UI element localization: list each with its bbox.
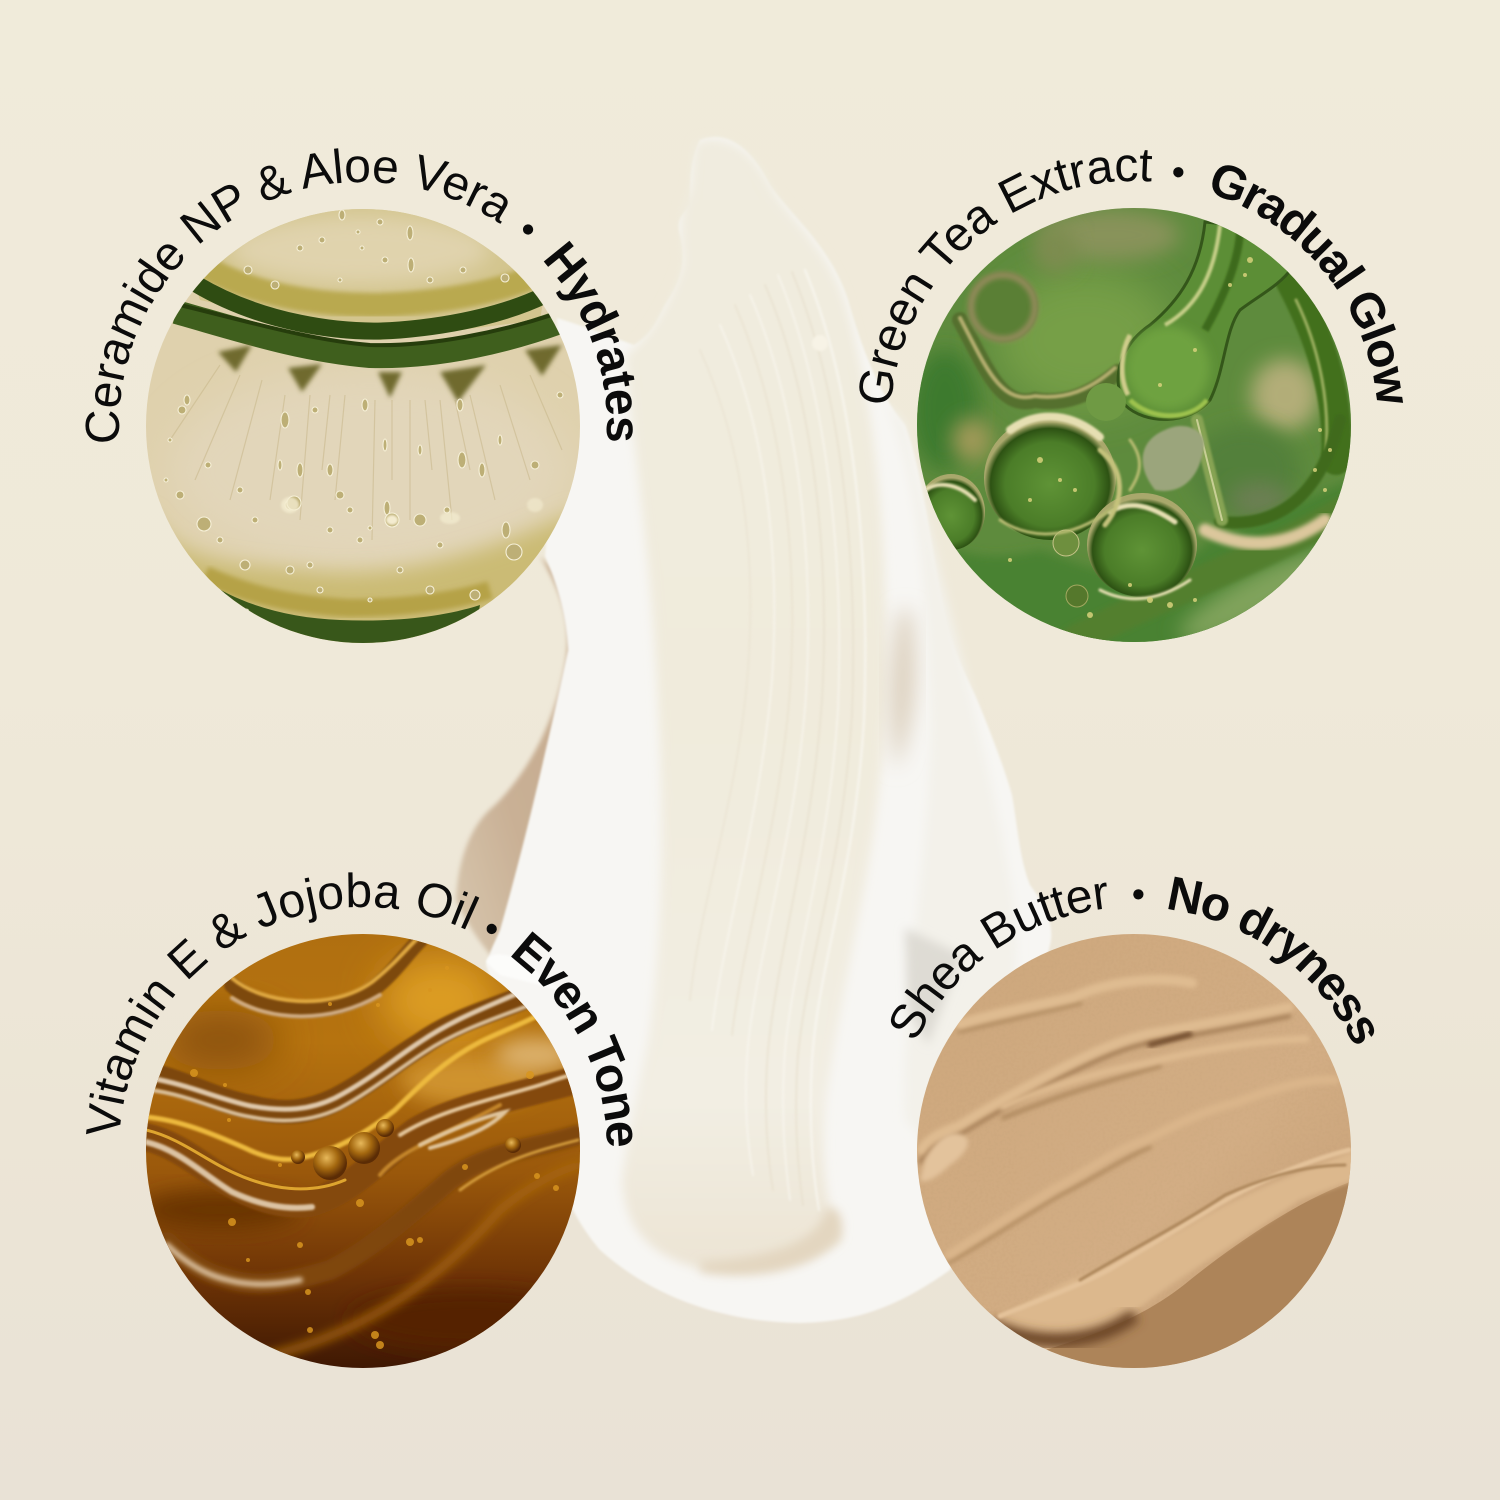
smear cast shadow <box>456 556 585 965</box>
tiny gold bubbles <box>1008 257 1332 618</box>
oil bubbles <box>313 1146 347 1180</box>
foam bubbles <box>984 416 1116 540</box>
photo: green tea bubbles <box>911 208 1351 660</box>
smear body <box>486 137 1051 1323</box>
bubble walls <box>960 280 1345 640</box>
photo: shea butter swirl <box>917 934 1355 1368</box>
smear brushed ridges <box>690 270 865 1210</box>
photo: golden oil waves <box>140 934 590 1368</box>
smear highlight bead <box>812 335 828 351</box>
infographic canvas <box>85 136 1404 1368</box>
lower left liquid <box>954 478 1344 642</box>
holes in foam <box>1086 383 1126 421</box>
aloe droplets <box>164 210 563 615</box>
label: Vitamin E and Jojoba Oil, Even Tone: Vitamin E & Jojoba Oil•Even Tone <box>86 872 632 1146</box>
panel: shea butter <box>890 876 1374 1368</box>
highlights <box>925 417 1190 599</box>
butter ridge lump <box>920 1133 968 1181</box>
cream smear <box>456 137 1051 1323</box>
aloe fibre pits <box>218 345 562 402</box>
panel: green tea extract <box>859 150 1404 642</box>
smear lip near oil circle <box>486 954 560 990</box>
aloe bright glints <box>281 497 543 525</box>
smear shadow patch right <box>905 928 962 1045</box>
panel: ceramide and aloe vera <box>85 148 634 643</box>
smear bottom fold <box>700 1208 842 1275</box>
aloe fibres <box>170 365 562 540</box>
panel: vitamin E and jojoba oil <box>86 872 632 1368</box>
label: Green Tea Extract, Gradual Glow: Green Tea Extract • Gradual Glow <box>859 150 1404 403</box>
smear shadow streak right <box>890 610 915 770</box>
smear brushed cream <box>622 139 886 1270</box>
glass neck and drop <box>1118 222 1292 419</box>
smear side shading <box>885 400 1016 1180</box>
label: Ceramide NP and Aloe Vera, Hydrates: Ceramide NP & Aloe Vera•Hydrates <box>85 148 634 442</box>
label: Shea Butter, No dryness: Shea Butter • No dryness <box>890 876 1374 1044</box>
photo: aloe vera slice <box>146 205 580 660</box>
